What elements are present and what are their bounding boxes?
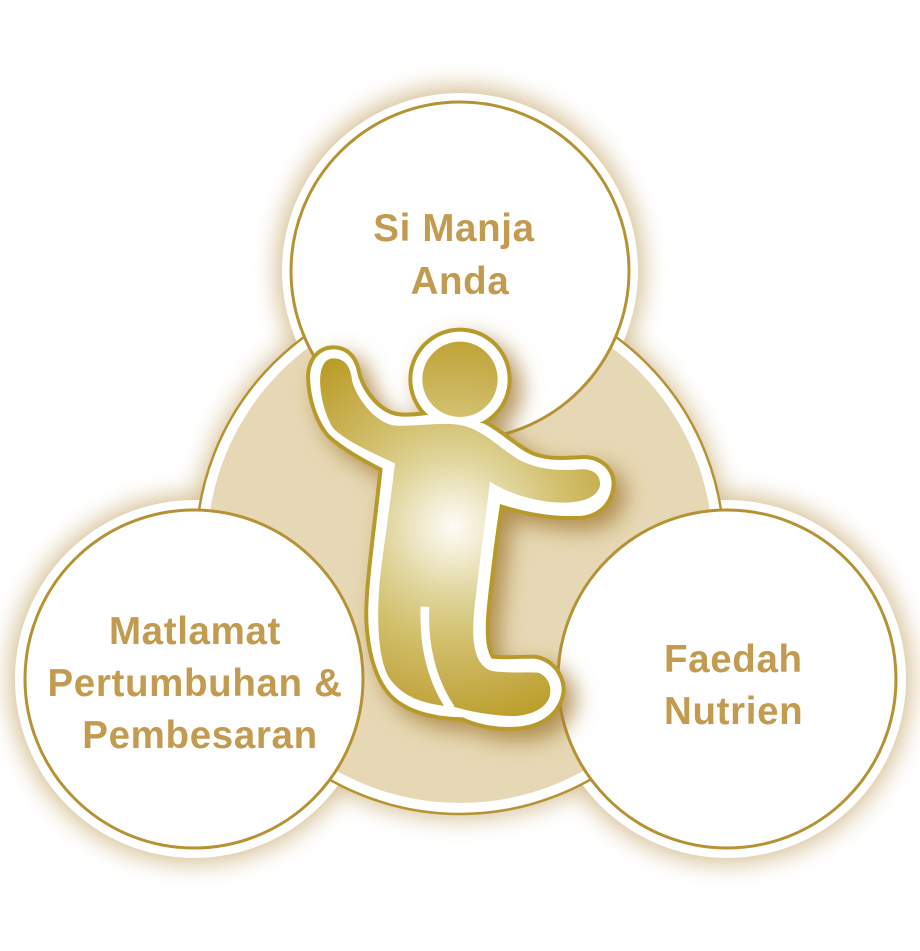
icon: golden child figure [310,332,612,727]
panel: right circle Faedah Nutrien [558,510,896,848]
figure body fill [320,358,600,716]
heading: Matlamat Pertumbuhan & Pembesaran: Pembesaran [82,714,318,757]
heading: Faedah Nutrien: Nutrien [664,690,803,733]
heading: Faedah Nutrien: Faedah [664,638,803,681]
heading: Matlamat Pertumbuhan & Pembesaran: Matlamat [109,610,281,653]
figure gold outline [310,332,612,727]
heading: Si Manja Anda: Anda [411,260,509,303]
white outer rings of small circles [15,93,906,858]
heading: Si Manja Anda: Si Manja [373,207,535,250]
figure leg divider [425,607,451,708]
figure head fill [422,342,498,417]
decorative glows behind circles [10,87,911,863]
panel: left circle Matlamat Pertumbuhan & Pembesaran [25,510,363,848]
heading: Matlamat Pertumbuhan & Pembesaran: Pertumbuhan & [47,662,343,705]
panel: large centre circle [196,286,724,814]
panel: top circle Si Manja Anda [291,102,629,440]
figure white band [310,332,612,727]
